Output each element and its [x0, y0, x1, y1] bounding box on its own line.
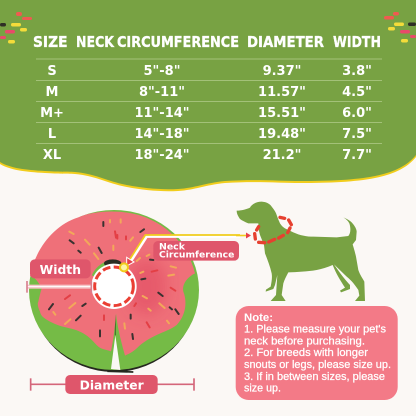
table row: XL: XL — [43, 148, 61, 163]
panel: note: 1. Please measure your pet's — [244, 324, 386, 336]
table row: S: S — [47, 64, 57, 79]
width measurement bar — [27, 281, 91, 293]
decoration: left sprinkles — [0, 12, 32, 44]
label: width — [30, 259, 91, 278]
diameter measurement — [31, 375, 194, 394]
table row: L — [48, 127, 372, 142]
dog silhouette with collar — [237, 202, 365, 301]
label: neck circumference: Neck — [159, 242, 185, 252]
table heading row — [33, 33, 381, 51]
table heading row: NECK — [76, 33, 115, 51]
diameter measurement: Diameter — [80, 377, 144, 392]
label: neck circumference — [153, 241, 239, 261]
table row: S: 9.37" — [263, 64, 301, 79]
yellow line linking to dog neck — [236, 232, 251, 238]
table row: M+: 15.51" — [258, 106, 306, 121]
panel: note — [236, 306, 398, 400]
table row: M: 4.5" — [342, 85, 372, 100]
neck opening — [91, 259, 137, 309]
table row: M: M — [46, 85, 58, 100]
table row: L: 7.5" — [342, 127, 372, 142]
table row: M — [46, 85, 372, 100]
table row: L: 19.48" — [258, 127, 306, 142]
panel: note: Note: — [244, 312, 273, 324]
panel: green size chart background — [0, 0, 416, 191]
sprinkles — [49, 219, 179, 339]
table row: M+ — [40, 106, 372, 121]
table heading row: DIAMETER — [247, 33, 324, 51]
panel: note: 3. If in between sizes, please — [244, 371, 385, 383]
table row: M+: M+ — [40, 106, 64, 121]
product photo: watermelon donut cone — [27, 210, 240, 394]
table row: S — [47, 64, 372, 79]
table row: XL: 18"-24" — [134, 148, 190, 163]
table row: M: 11.57" — [258, 85, 306, 100]
table row: S: 3.8" — [342, 64, 372, 79]
table row: S: 5"-8" — [143, 64, 181, 79]
decoration: right sprinkles — [384, 12, 416, 42]
panel: note: size up. — [244, 382, 281, 394]
table row: M+: 6.0" — [342, 106, 372, 121]
table heading row: CIRCUMFERENCE — [117, 33, 239, 51]
panel: note: snouts or legs, please size up. — [244, 359, 391, 371]
panel: note: neck before purchasing. — [244, 336, 365, 348]
panel: note: 2. For breeds with longer — [244, 347, 368, 359]
label: width: Width — [40, 262, 81, 277]
table row: M: 8"-11" — [139, 85, 185, 100]
table heading row: WIDTH — [333, 33, 381, 51]
label: neck circumference: Circumference — [159, 251, 234, 261]
table heading row: SIZE — [33, 33, 68, 51]
table row: XL: 21.2" — [263, 148, 301, 163]
table row: L: 14"-18" — [134, 127, 190, 142]
table row: XL — [43, 148, 372, 163]
neck leader line and arrow — [120, 235, 240, 271]
table row: L: L — [48, 127, 56, 142]
table row: M+: 11"-14" — [134, 106, 190, 121]
table row: XL: 7.7" — [342, 148, 372, 163]
